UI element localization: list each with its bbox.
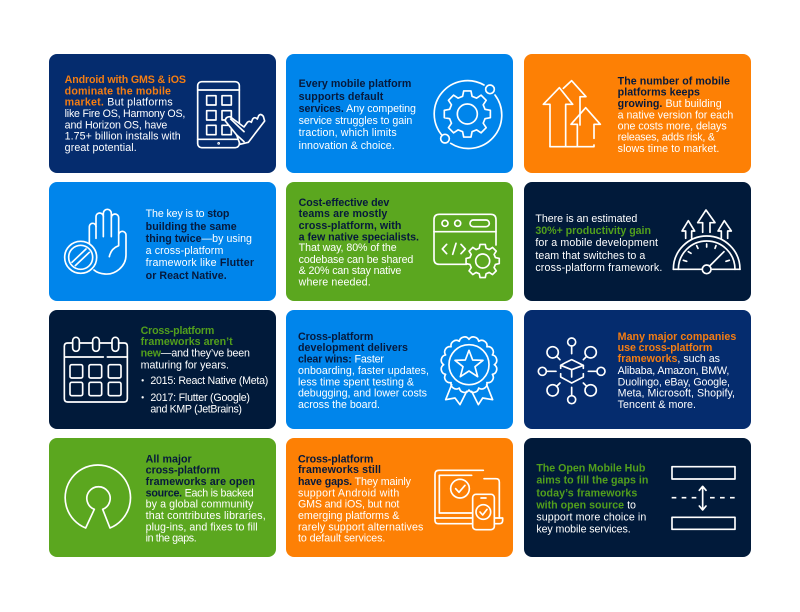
text: productivity gain: 30%+ productivity gain [535,225,651,237]
text: clear wins: debugging, and lower costs [298,387,427,399]
text: companies: frameworks, such as [618,353,720,365]
text: open source: by a global community [146,499,254,511]
text: Open Mobile Hub: aims to fill the gaps in [536,474,648,486]
text: productivity gain [535,213,662,274]
text: dev teams: That way, 80% of the [299,242,397,254]
text: stop building twice: thing twice—by using [146,233,252,245]
text: platform growth: growing. But building [618,98,722,110]
text: companies: Alibaba, Amazon, BMW, [618,365,729,377]
icon: speedometer with arrows [673,210,740,274]
text: framework history: frameworks aren’t [141,336,233,348]
text: stop building twice: The key is to stop [146,208,230,220]
text: framework gaps: to default services. [298,532,385,544]
icon: tablet with tapping hand [198,82,265,148]
text: stop building twice: framework like Flutter [146,257,254,269]
text: companies: use cross-platform [618,342,712,354]
panel: cost-effective dev teams [286,182,513,301]
text: default services: service struggles to gain [299,115,412,127]
panel: Open Mobile Hub [524,438,751,557]
panel: Android and iOS dominate [49,54,276,173]
icon: laptop and phone with checks [435,470,503,530]
text: clear wins: Cross-platform [298,331,373,343]
text: clear wins: across the board. [298,399,380,411]
text: Open Mobile Hub: support more choice in [536,511,646,523]
text: market dominance [65,74,186,154]
text: Open Mobile Hub: key mobile services. [536,523,631,535]
text: framework history: and KMP (JetBrains) [150,403,242,415]
panel: clear wins [286,310,513,429]
text: clear wins: onboarding, faster updates, [298,365,429,377]
panel: default services [286,54,513,173]
text: framework gaps: rarely support alternatives [298,521,423,533]
text: open source: All major [146,453,192,465]
text: open source [146,453,266,544]
text: Open Mobile Hub: today’s frameworks [536,487,637,499]
panel: platforms keep growing [524,54,751,173]
panel: major companies [524,310,751,429]
text: dev teams: Cost-effective dev [299,197,389,209]
text: framework gaps: have gaps. They mainly [298,476,412,488]
panel: stop building twice [49,182,276,301]
text: dev teams [298,197,419,288]
text: framework gaps: Cross-platform [298,453,373,465]
text: platform growth: a native version for each [618,109,733,121]
text: stop building twice: or React Native. [146,270,227,282]
icon: three rising arrows [543,81,600,147]
text: companies: Duolingo, eBay, Google, [618,376,730,388]
text: open source: plug-ins, and fixes to fill [146,521,258,533]
text: market dominance: like Fire OS, Harmony OS, [65,108,185,120]
text: framework history [141,325,268,415]
text: open source: frameworks are open [146,476,255,488]
text: platform growth: releases, adds risk, & [618,132,715,144]
text: open source: cross-platform [146,464,220,476]
text: productivity gain: There is an estimated [535,213,637,225]
text: dev teams: codebase can be shared [299,254,413,266]
text: clear wins: less time spent testing & [298,376,414,388]
text: clear wins [298,331,429,411]
text: clear wins: development delivers [298,342,408,354]
text: framework gaps: emerging platforms & [298,510,399,522]
text: dev teams: a few native specialists. [299,231,419,243]
text: default services: innovation & choice. [299,140,395,152]
text: framework history: Cross-platform [141,325,214,337]
text: companies [618,331,736,411]
text: dev teams: teams are mostly [299,208,387,220]
text: stop building twice [146,208,254,282]
text: companies: Meta, Microsoft, Shopify, [618,387,735,399]
text: productivity gain: for a mobile development [535,237,658,249]
text: default services [299,78,416,152]
text: dev teams: where needed. [298,276,371,288]
text: framework history: 2017: Flutter (Google) [150,392,250,404]
text: dev teams: cross-platform, with [299,220,401,232]
text: stop building twice: building the same [146,221,237,233]
text: Open Mobile Hub [535,462,648,535]
text: market dominance: dominate the mobile [65,85,171,97]
text: default services: supports default [299,91,384,103]
text: open source: source. Each is backed [146,487,254,499]
text: platform growth: one costs more, delays [618,120,727,132]
text: dev teams: & 20% can stay native [299,265,401,277]
text: market dominance: 1.75+ billion installs with [65,131,181,143]
icon: calendar [64,337,127,402]
panel: frameworks maturing [49,310,276,429]
icon: gear with orbit [434,81,502,148]
text: default services: Every mobile platform [299,78,411,90]
text: open source: that contributes libraries, [146,510,266,522]
text: companies: Many major companies [618,331,736,343]
text: platform growth [618,75,733,155]
text: platform growth: The number of mobile [618,75,730,87]
text: framework history: new—and they’ve been [141,347,250,359]
icon: stop hand [65,209,126,274]
text: framework gaps: GMS and iOS, but not [298,498,399,510]
text: default services: services. Any competing [299,103,416,115]
text: open source: in the gaps. [146,532,197,544]
text: framework history: maturing for years. [141,359,229,371]
text: companies: Tencent & more. [618,399,696,411]
text: Open Mobile Hub: with open source to [535,499,636,511]
text: market dominance: great potential. [65,142,137,154]
text: productivity gain: cross-platform framework. [535,262,662,274]
text: stop building twice: a cross-platform [146,245,223,257]
icon: bridging the gap [672,467,735,529]
panel: framework gaps [286,438,513,557]
panel: productivity gain [524,182,751,301]
text: productivity gain: team that switches to a [535,250,645,262]
text: Open Mobile Hub: The Open Mobile Hub [536,462,646,474]
icon: code window with gear [434,214,499,278]
text: platform growth: platforms keeps [618,86,700,98]
text: framework history: 2015: React Native (Meta) [150,375,268,387]
text: market dominance: and Horizon OS, have [65,119,167,131]
text: market dominance: market. But platforms [65,97,173,109]
icon: award badge [441,337,497,405]
text: framework gaps: support Android with [298,487,399,499]
text: framework gaps [298,453,423,544]
icon: cube network [538,338,605,404]
text: clear wins: clear wins: Faster [298,353,384,365]
panel: open source [49,438,276,557]
text: default services: traction, which limits [299,127,397,139]
text: market dominance: Android with GMS & iOS [65,74,186,86]
icon: open source logo [65,465,130,528]
text: framework gaps: frameworks still [298,464,381,476]
text: platform growth: slows time to market. [618,143,719,155]
